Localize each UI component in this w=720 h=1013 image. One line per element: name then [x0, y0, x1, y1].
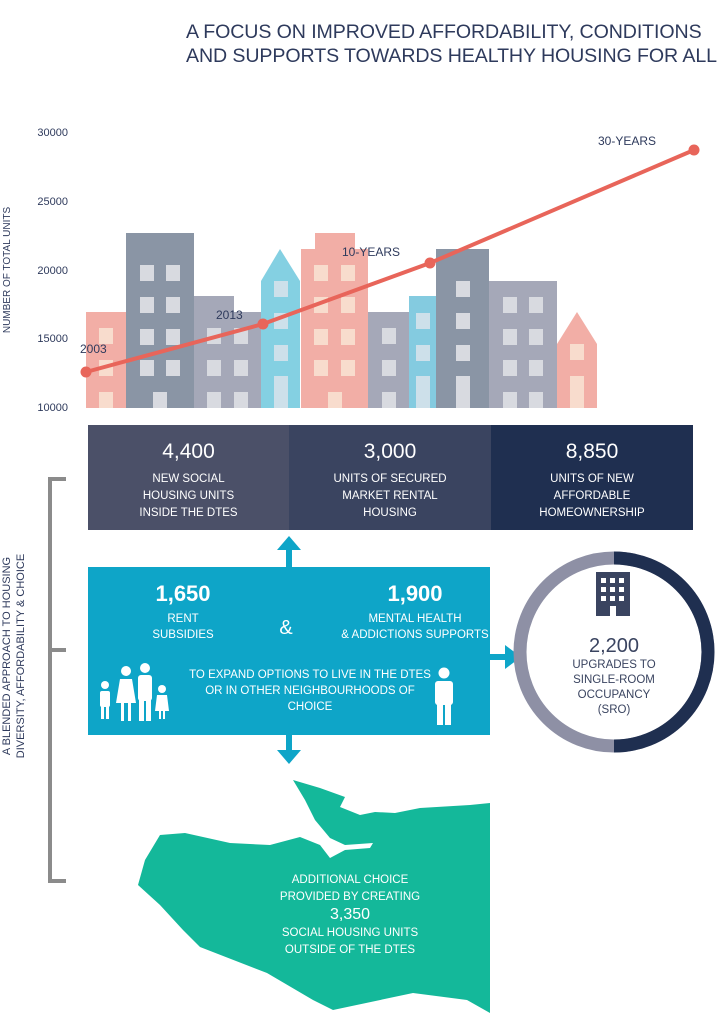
stat: 4,400: HOUSING UNITS	[143, 490, 234, 502]
y-axis labels: 20000	[37, 265, 68, 277]
trend line	[80, 134, 700, 378]
SRO ring: OCCUPANCY	[578, 689, 650, 701]
bracket label: A BLENDED APPROACH TO HOUSING	[1, 557, 13, 755]
SRO ring: UPGRADES TO	[572, 659, 656, 671]
icon: building	[596, 572, 630, 616]
y-axis labels	[37, 127, 68, 414]
map: outside DTES: SOCIAL HOUSING UNITS	[282, 927, 418, 939]
supports panel: &	[279, 617, 293, 639]
supports panel: 1,900	[387, 581, 443, 606]
stat: 4,400	[88, 425, 289, 530]
supports panel: RENT	[167, 613, 199, 625]
SRO ring: SINGLE-ROOM	[573, 674, 655, 686]
title: A FOCUS ON IMPROVED AFFORDABILITY, CONDITIONS	[186, 21, 702, 43]
supports panel: OR IN OTHER NEIGHBOURHOODS OF	[205, 685, 415, 697]
trend line: 30-YEARS	[598, 134, 656, 148]
stat: 8,850: HOMEOWNERSHIP	[539, 507, 645, 519]
stat: 3,000: UNITS OF SECURED	[333, 473, 447, 485]
icon: family	[100, 663, 169, 721]
title: AND SUPPORTS TOWARDS HEALTHY HOUSING FOR ALL	[186, 45, 717, 67]
stat: 8,850: 8,850	[566, 440, 618, 463]
map: outside DTES: 3,350	[330, 906, 370, 923]
stat: 3,000: MARKET RENTAL	[342, 490, 438, 502]
title	[186, 21, 717, 67]
map: outside DTES: ADDITIONAL CHOICE	[292, 874, 408, 886]
supports panel: TO EXPAND OPTIONS TO LIVE IN THE DTES	[189, 669, 431, 681]
icon: person	[435, 668, 453, 725]
supports panel: & ADDICTIONS SUPPORTS	[341, 629, 489, 641]
y-axis title: NUMBER OF TOTAL UNITS	[2, 207, 13, 333]
y-axis labels: 15000	[37, 333, 68, 345]
supports panel: CHOICE	[288, 701, 332, 713]
SRO ring: (SRO)	[598, 704, 630, 716]
SRO ring: 2,200	[589, 635, 639, 657]
bracket	[48, 477, 66, 883]
trend line: 10-YEARS	[342, 245, 400, 259]
stat: 8,850	[491, 425, 693, 530]
buildings	[86, 233, 597, 408]
supports panel: SUBSIDIES	[152, 629, 214, 641]
stat: 8,850: UNITS OF NEW	[550, 473, 634, 485]
bracket label: DIVERSITY, AFFORDABILITY & CHOICE	[15, 554, 27, 758]
supports panel: MENTAL HEALTH	[368, 613, 462, 625]
SRO ring	[514, 552, 714, 752]
chart: units over time	[2, 127, 700, 414]
stat: 8,850: AFFORDABLE	[554, 490, 630, 502]
stat: 3,000: 3,000	[364, 440, 416, 463]
trend line: 2013	[216, 308, 243, 322]
stats panels	[88, 425, 693, 530]
trend line: 2003	[80, 342, 107, 356]
stat: 3,000: HOUSING	[363, 507, 417, 519]
y-axis labels: 10000	[37, 402, 68, 414]
stat: 3,000	[289, 425, 491, 530]
map: outside DTES: OUTSIDE OF THE DTES	[285, 944, 415, 956]
supports panel: 1,650	[155, 581, 211, 606]
stat: 4,400: INSIDE THE DTES	[139, 507, 238, 519]
bracket label	[1, 554, 27, 758]
y-axis labels: 25000	[37, 196, 68, 208]
stat: 4,400: 4,400	[162, 440, 215, 463]
supports panel	[88, 567, 490, 735]
stat: 4,400: NEW SOCIAL	[152, 473, 225, 485]
map: outside DTES: PROVIDED BY CREATING	[280, 891, 420, 903]
y-axis labels: 30000	[37, 127, 68, 139]
map: outside DTES	[138, 780, 490, 1013]
